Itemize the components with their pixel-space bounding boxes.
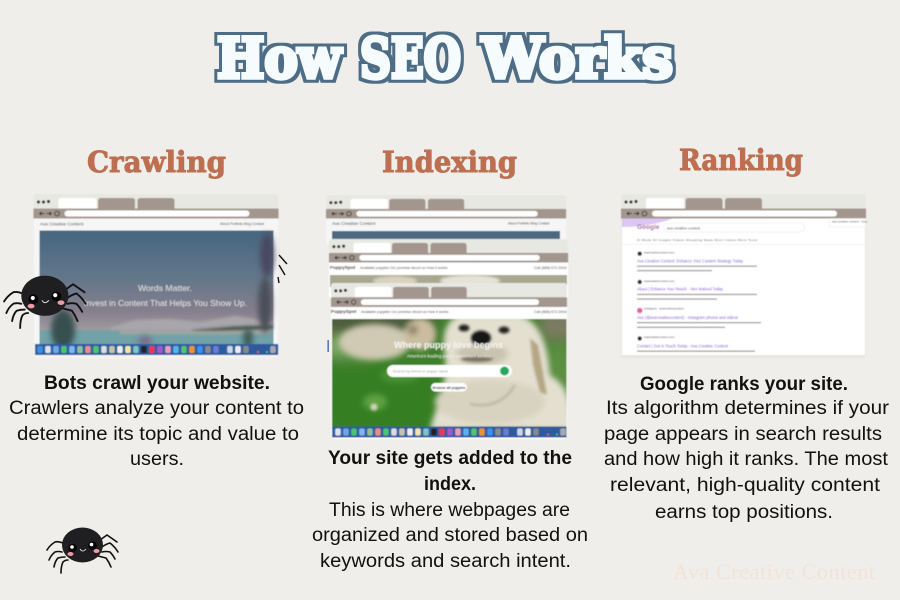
heading: crawling: Crawling (87, 145, 226, 179)
window 3 (325, 283, 575, 439)
window 3: Where puppy love begins (394, 340, 503, 350)
panel: indexing (312, 145, 588, 572)
browser screenshot: google results: ava creative content - Goo (832, 220, 868, 224)
title: Works (481, 26, 673, 90)
icon: spider bottom left (47, 528, 118, 573)
icon: spider legs at window edge (278, 255, 287, 283)
text: crawling description: Crawlers analyze your content to (9, 398, 304, 419)
browser screenshot: google results: AI Mode All Images Videos Shopping News Short videos More Tools (637, 238, 757, 242)
window 3: Search by breed or puppy name (392, 368, 448, 374)
window 3: Available puppies Our promise About us How it works (361, 310, 449, 314)
window 1 (326, 195, 566, 245)
window 3: PuppySpot (331, 309, 357, 315)
text: indexing description: index. (424, 474, 476, 495)
window 3: Call (888) 672-3916 (534, 310, 567, 314)
browser screenshot: google results: avacreativecontent.com (644, 250, 675, 254)
text: ranking description: Google ranks your site. (640, 374, 848, 395)
text: ranking description: relevant, high-quality content (610, 475, 881, 496)
window 3: Browse all puppies (433, 386, 465, 390)
icon: spider crawling (4, 276, 86, 328)
text: crawling description: users. (130, 449, 184, 470)
title (217, 26, 673, 90)
browser screenshot: crawling: Ava Creative Content (40, 222, 84, 226)
text: ranking description: Its algorithm determines if your (606, 398, 890, 419)
text: crawling description: Bots crawl your website. (44, 373, 270, 394)
browser screenshot: crawling: Words Matter. (138, 283, 192, 293)
text: indexing description: organized and stored based on (312, 525, 588, 546)
panel: crawling (4, 145, 304, 470)
browser screenshot: google results: Google (637, 224, 660, 231)
browser screenshot: crawling: About Portfolio Blog Contact (220, 222, 264, 226)
window 1: Ava Creative Content (332, 221, 376, 226)
heading: ranking: Ranking (679, 143, 803, 177)
text: indexing description (312, 448, 588, 572)
browser screenshot: google results: avacreativecontent.com (644, 279, 675, 283)
browser screenshot: google results: Ava (@avacreativecontent) - Instagram photos and videos (637, 315, 738, 320)
text: ranking description: earns top positions. (655, 502, 833, 523)
text: indexing description: This is where webpages are (329, 500, 570, 521)
window 2 (329, 239, 568, 299)
window 2: PuppySpot (330, 265, 356, 271)
browser screenshots: indexing stack (325, 195, 575, 439)
text: ranking description: page appears in search results (604, 424, 882, 445)
browser screenshot: google results: Instagram · avacreativecontent (644, 306, 684, 310)
title: SEO (360, 26, 461, 90)
panel: ranking (604, 143, 890, 523)
window 3: America's leading puppy placement service (407, 354, 492, 358)
window 1: About Portfolio Blog Contact (508, 222, 550, 226)
title: How (217, 26, 343, 90)
heading: indexing: Indexing (382, 145, 517, 179)
browser screenshot: google results: Contact | Get in Touch Today - Ava Creative Content (637, 343, 729, 348)
accent: blue sliver (328, 340, 329, 352)
text: ranking description: and how high it ranks. The most (604, 449, 889, 470)
text: crawling description: determine its topic and value to (17, 424, 299, 445)
watermark: Ava Creative Content (673, 559, 875, 584)
text: crawling description (9, 373, 304, 470)
browser screenshot: google results: About | Enhance Your Reach - Hire Noticed Today (637, 286, 724, 292)
browser screenshot: google results: ava creative content (667, 226, 700, 230)
browser screenshot: google results: Ava Creative Content: Enhance Your Content Strategy Today (637, 258, 744, 263)
text: indexing description: Your site gets added to the (328, 448, 572, 469)
window 2: Call (888) 672-3916 (534, 266, 567, 270)
browser screenshot: google results: avacreativecontent.com (644, 335, 675, 339)
browser screenshot: crawling (34, 194, 278, 358)
text: ranking description (604, 374, 890, 523)
browser screenshot: google results (621, 194, 868, 358)
browser screenshot: crawling: Invest in Content That Helps You Show Up. (84, 298, 247, 308)
text: indexing description: keywords and search intent. (320, 551, 571, 572)
window 2: Available puppies Our promise About us How it works (360, 266, 448, 270)
